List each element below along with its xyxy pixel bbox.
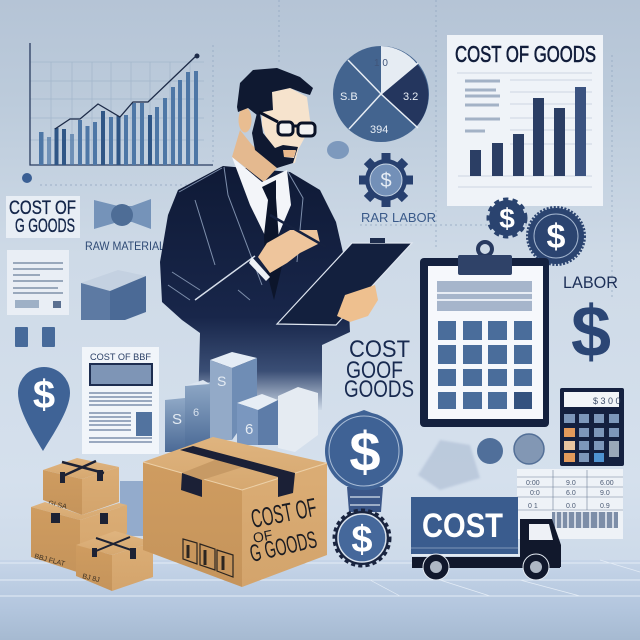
icon: dollar medal: $: [547, 218, 566, 256]
tape shadow: [182, 458, 246, 480]
document: cost of bbf: [82, 347, 159, 454]
icon: small round badge: [22, 173, 32, 183]
icon: dollar location pin: [18, 367, 70, 451]
receipt table: 0:00: [526, 480, 540, 487]
pie chart: 394: [370, 124, 388, 136]
receipt table: 9.0: [600, 490, 610, 497]
label: labor: LABOR: [563, 273, 618, 292]
icon: gear dollar: [359, 153, 413, 207]
product blocks: 6: [193, 407, 199, 419]
label: cost of goods left: G GOODS: [15, 216, 75, 237]
text: cost goof goods: [344, 336, 414, 403]
line and bar chart: [30, 43, 213, 165]
shelf behind boxes: [120, 481, 143, 536]
glasses: [278, 122, 315, 136]
barcode: [552, 512, 618, 528]
box label: G GOODS: [247, 526, 320, 568]
tie: [262, 180, 283, 300]
pie chart: [333, 46, 429, 142]
clipboard held: [277, 238, 412, 325]
box label: [247, 492, 320, 568]
receipt table: 6.00: [600, 480, 614, 487]
icons: faded workers and spheres: [418, 434, 544, 490]
product blocks: [165, 352, 318, 452]
lips: [283, 150, 296, 157]
icon: dollar gear coin: [335, 511, 389, 565]
body: [160, 166, 350, 410]
truck label: COST: [422, 507, 503, 545]
icon: dollar coin with stem: $: [349, 420, 381, 483]
box label: COST OF: [248, 492, 319, 534]
icon: gear dollar: $: [380, 170, 392, 192]
cardboard box: small front: [76, 531, 153, 591]
receipt table: 0:0: [530, 490, 540, 497]
icon: dollar gear coin: $: [351, 519, 373, 561]
sleeve edge: [195, 256, 255, 300]
small calculator: [560, 388, 624, 466]
ear: [238, 108, 252, 132]
document: cost of bbf: COST OF BBF: [90, 352, 151, 363]
face: [262, 88, 315, 165]
icons: small squares: [15, 327, 55, 347]
pie chart: 1 0: [374, 58, 388, 69]
floor: [0, 560, 640, 640]
tape: [180, 446, 295, 497]
shirt: [232, 157, 291, 250]
icon: dollar coin with stem: [325, 410, 403, 512]
text: cost goof goods: COST: [349, 336, 410, 363]
cardboard box: small top: [43, 458, 119, 515]
icon: dollar medal: [528, 208, 584, 264]
wheels: [423, 554, 449, 580]
text: cost goof goods: GOODS: [344, 376, 414, 403]
receipt table: 0.9: [600, 503, 610, 510]
handling icons: [183, 539, 233, 577]
receipt table: 0.0: [566, 503, 576, 510]
cardboard box: small middle: BBJ FLAT: [33, 553, 66, 568]
pie chart: 3.2: [403, 91, 418, 103]
label: raw material: RAW MATERIAL: [85, 239, 165, 253]
pie chart: S.B: [340, 91, 358, 103]
icon: large dollar: $: [571, 292, 611, 372]
receipt table: 9.0: [566, 480, 576, 487]
label: cost of goods left: [6, 196, 80, 238]
neck: [232, 130, 277, 182]
icon: small sphere: [327, 141, 349, 159]
cardboard box: small top: GLSA: [48, 500, 68, 511]
panel: cost of goods bar chart: [447, 35, 603, 206]
receipt table: 6.0: [566, 490, 576, 497]
receipt table: 0 1: [528, 503, 538, 510]
clipboard calculator: [420, 242, 549, 427]
product blocks: 6: [245, 421, 253, 438]
icon: dollar gear small: [489, 200, 525, 236]
label: cost of goods left: COST OF: [9, 198, 76, 219]
cuff: [249, 257, 270, 281]
cardboard box: large cost of goods: [143, 437, 327, 587]
icon: raw material box: [81, 270, 146, 320]
product blocks: S: [217, 373, 226, 389]
label: rar labor: RAR LABOR: [361, 210, 436, 225]
lapels: [168, 167, 303, 300]
hair: [237, 68, 313, 115]
text: cost goof goods: GOOF: [346, 357, 403, 384]
receipt table: [517, 469, 623, 539]
cardboard box: small front: BJ 8J: [82, 573, 100, 584]
box label: OF: [252, 527, 274, 546]
document: left form: [7, 250, 69, 315]
truck: [411, 497, 561, 580]
product blocks: S: [172, 411, 182, 428]
icon: dollar location pin: $: [33, 373, 55, 417]
hand under clipboard: [337, 285, 378, 322]
icon: dollar gear small: $: [499, 203, 515, 234]
bars: [470, 87, 586, 176]
man in suit: [160, 68, 350, 410]
cab: [520, 519, 561, 567]
hand with pen: [258, 230, 320, 273]
cardboard box: small middle: [31, 502, 127, 573]
icon: raw material bow: [94, 199, 151, 229]
keypad: [438, 321, 532, 409]
small calculator: $ 3 0 0: [593, 396, 621, 406]
beard: [252, 113, 298, 168]
